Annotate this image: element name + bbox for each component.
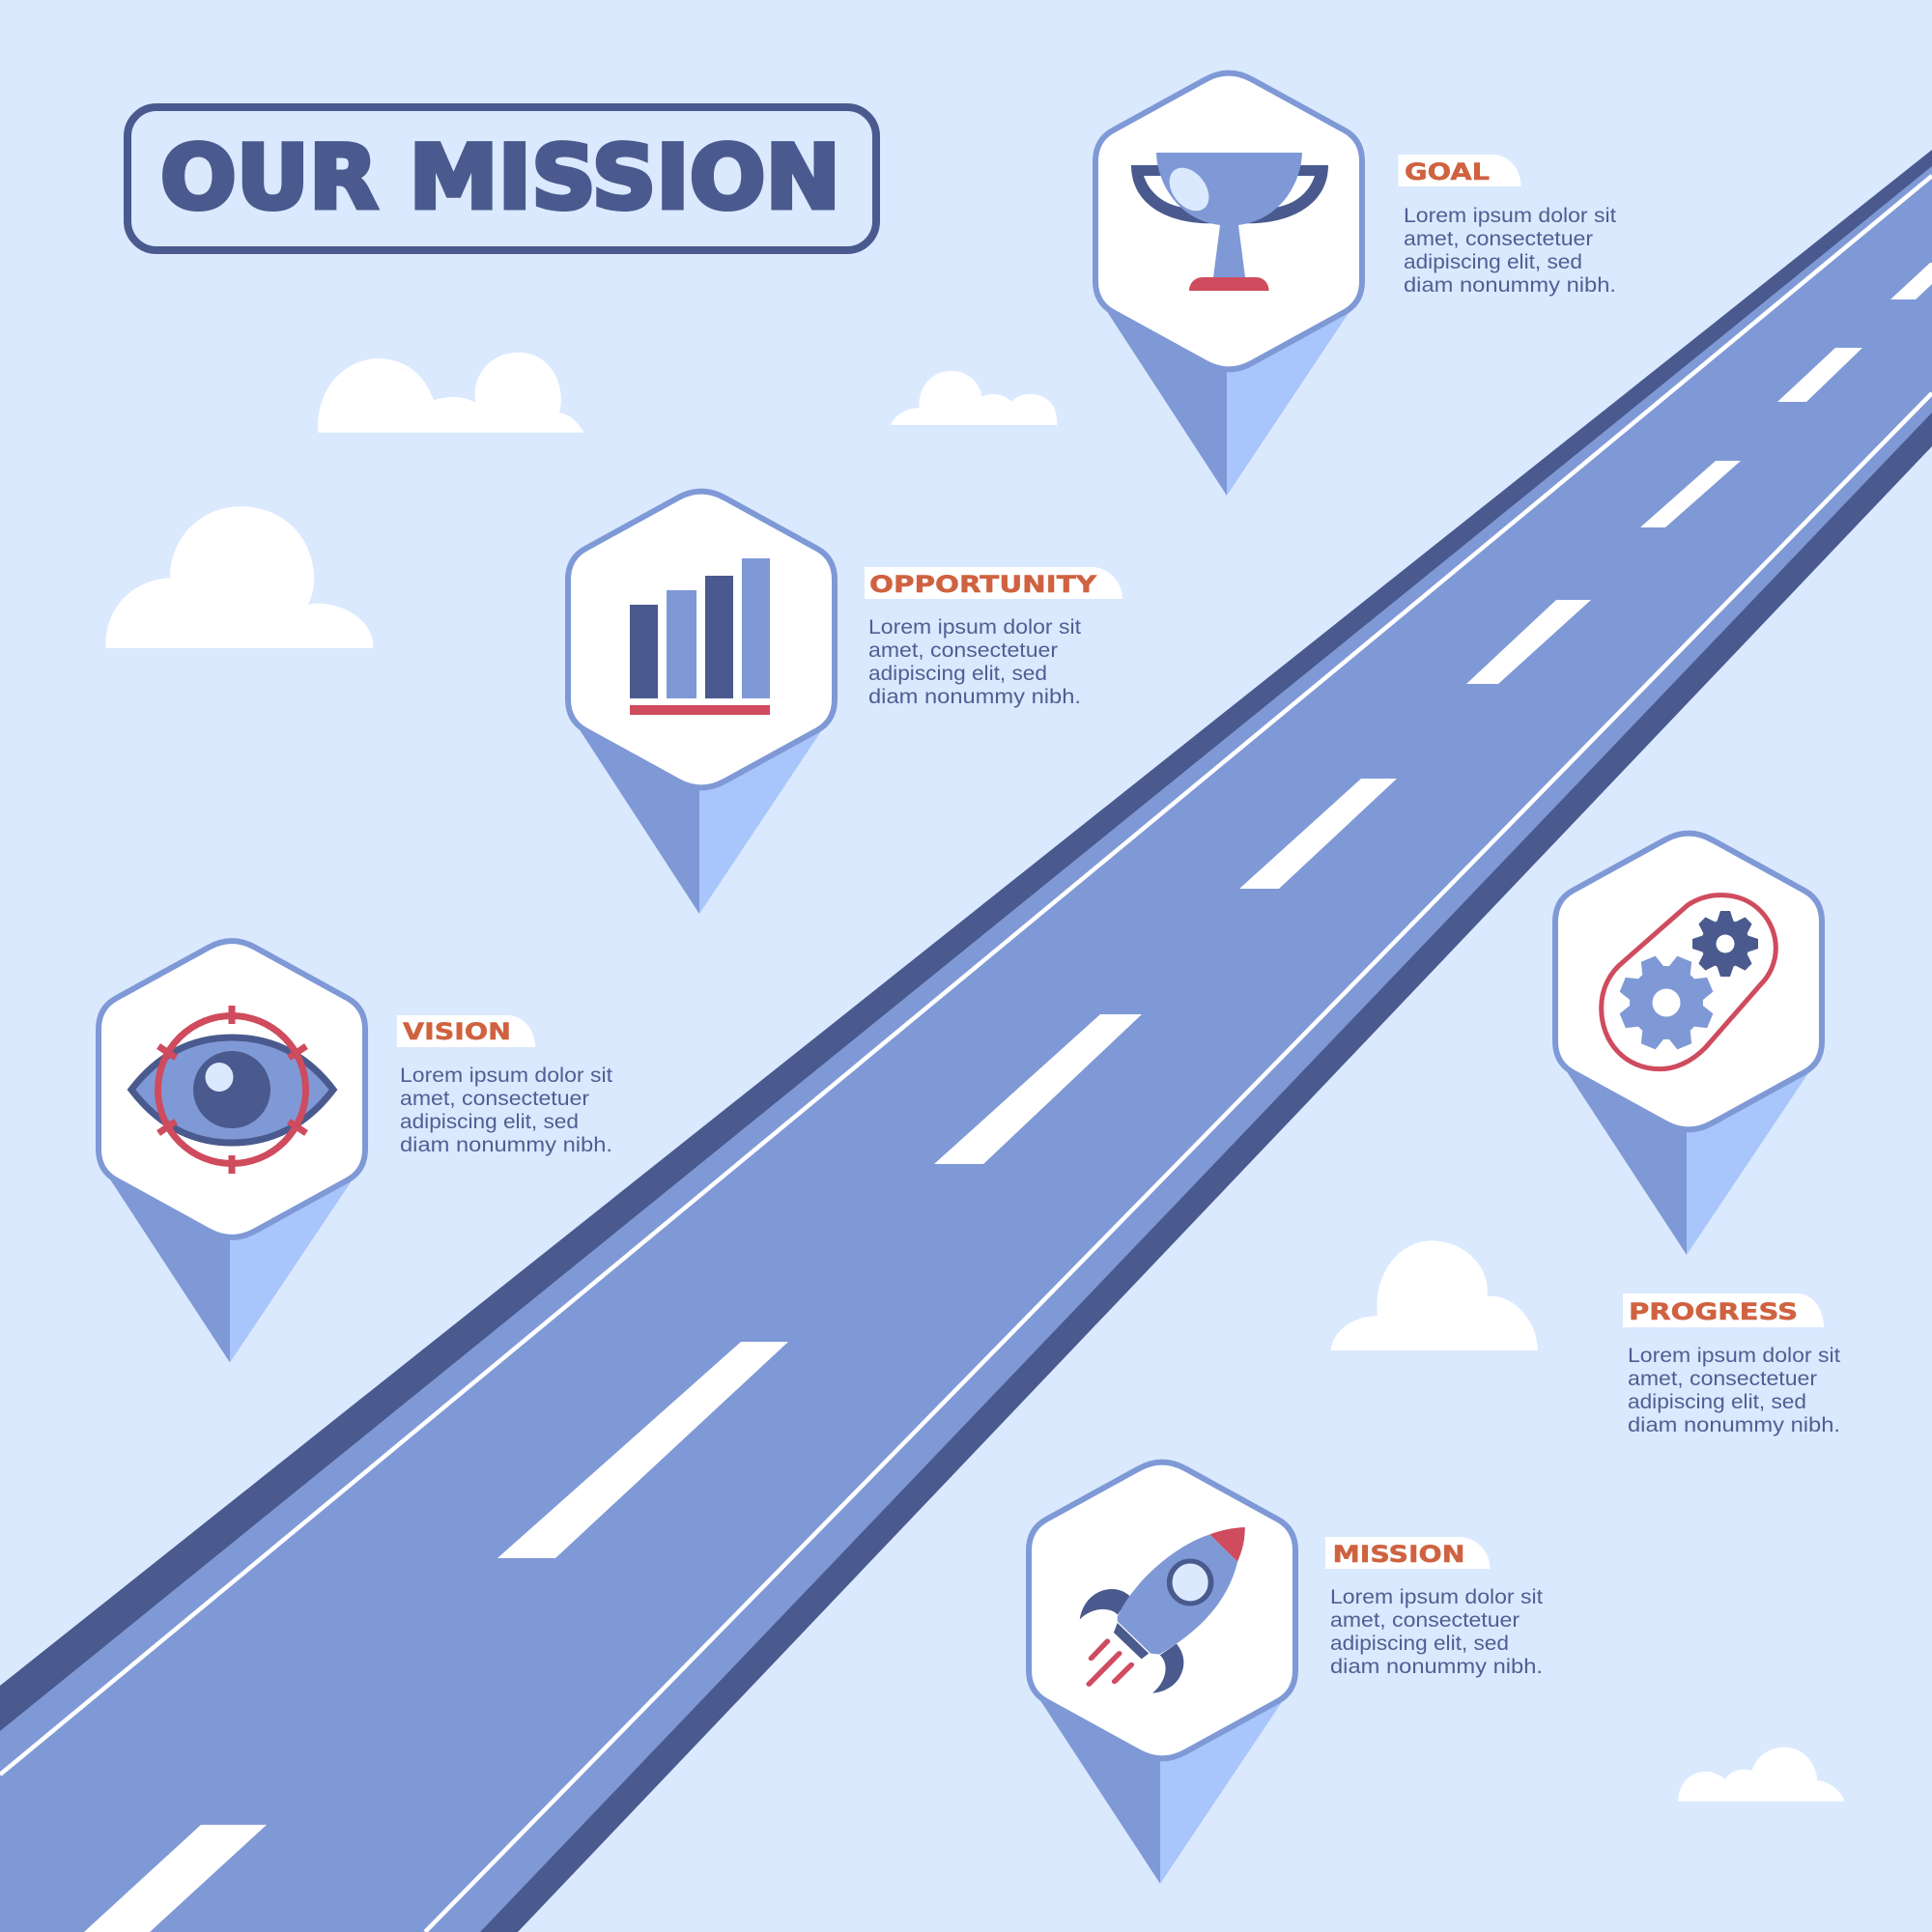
pin: mission: [1027, 1463, 1295, 1884]
icon: gears: [1602, 895, 1776, 1069]
title: OUR MISSION: [160, 128, 840, 229]
panel: goal: [1094, 73, 1616, 496]
panel: vision: [97, 941, 612, 1362]
text: opportunity: [868, 616, 1081, 708]
pin: goal: [1094, 73, 1362, 496]
text: opportunity: amet, consectetuer: [868, 639, 1058, 662]
pin: opportunity: [566, 492, 835, 914]
text: progress: adipiscing elit, sed: [1628, 1391, 1806, 1413]
label: progress: PROGRESS: [1629, 1298, 1798, 1325]
text: goal: amet, consectetuer: [1404, 228, 1593, 250]
text: progress: [1628, 1345, 1840, 1436]
label: mission: MISSION: [1333, 1541, 1464, 1568]
text: opportunity: adipiscing elit, sed: [868, 663, 1047, 685]
text: opportunity: Lorem ipsum dolor sit: [868, 616, 1081, 639]
text: mission: diam nonummy nibh.: [1330, 1656, 1543, 1678]
text: mission: amet, consectetuer: [1330, 1609, 1520, 1632]
label: vision: VISION: [403, 1018, 511, 1045]
pin: vision: [97, 941, 365, 1362]
icon: bar chart: [630, 558, 770, 715]
label: vision: [397, 1015, 535, 1047]
text: vision: Lorem ipsum dolor sit: [400, 1065, 612, 1087]
text: goal: Lorem ipsum dolor sit: [1404, 205, 1616, 227]
text: goal: adipiscing elit, sed: [1404, 251, 1582, 273]
text: vision: adipiscing elit, sed: [400, 1111, 579, 1133]
text: vision: amet, consectetuer: [400, 1088, 589, 1110]
text: progress: amet, consectetuer: [1628, 1368, 1817, 1390]
clouds: [106, 353, 1844, 1802]
label: goal: GOAL: [1405, 158, 1490, 185]
label: mission: [1325, 1537, 1490, 1569]
panel: opportunity: [566, 492, 1122, 914]
pin: progress: [1553, 834, 1822, 1255]
text: goal: diam nonummy nibh.: [1404, 274, 1616, 297]
label: progress: [1623, 1293, 1824, 1327]
title: [128, 107, 876, 250]
text: progress: Lorem ipsum dolor sit: [1628, 1345, 1840, 1367]
icon: rocket: [1080, 1527, 1245, 1693]
text: mission: [1330, 1586, 1543, 1678]
text: mission: adipiscing elit, sed: [1330, 1633, 1509, 1655]
label: opportunity: [865, 567, 1122, 599]
text: goal: [1404, 205, 1616, 297]
text: progress: diam nonummy nibh.: [1628, 1414, 1840, 1436]
label: goal: [1399, 155, 1520, 186]
panel: progress: [1553, 834, 1840, 1436]
icon: trophy: [1131, 153, 1328, 291]
icon: eye with target: [131, 1006, 333, 1174]
text: mission: Lorem ipsum dolor sit: [1330, 1586, 1543, 1608]
label: opportunity: OPPORTUNITY: [869, 571, 1097, 598]
panel: mission: [1027, 1463, 1543, 1884]
text: vision: [400, 1065, 612, 1156]
text: vision: diam nonummy nibh.: [400, 1134, 612, 1156]
text: opportunity: diam nonummy nibh.: [868, 686, 1081, 708]
